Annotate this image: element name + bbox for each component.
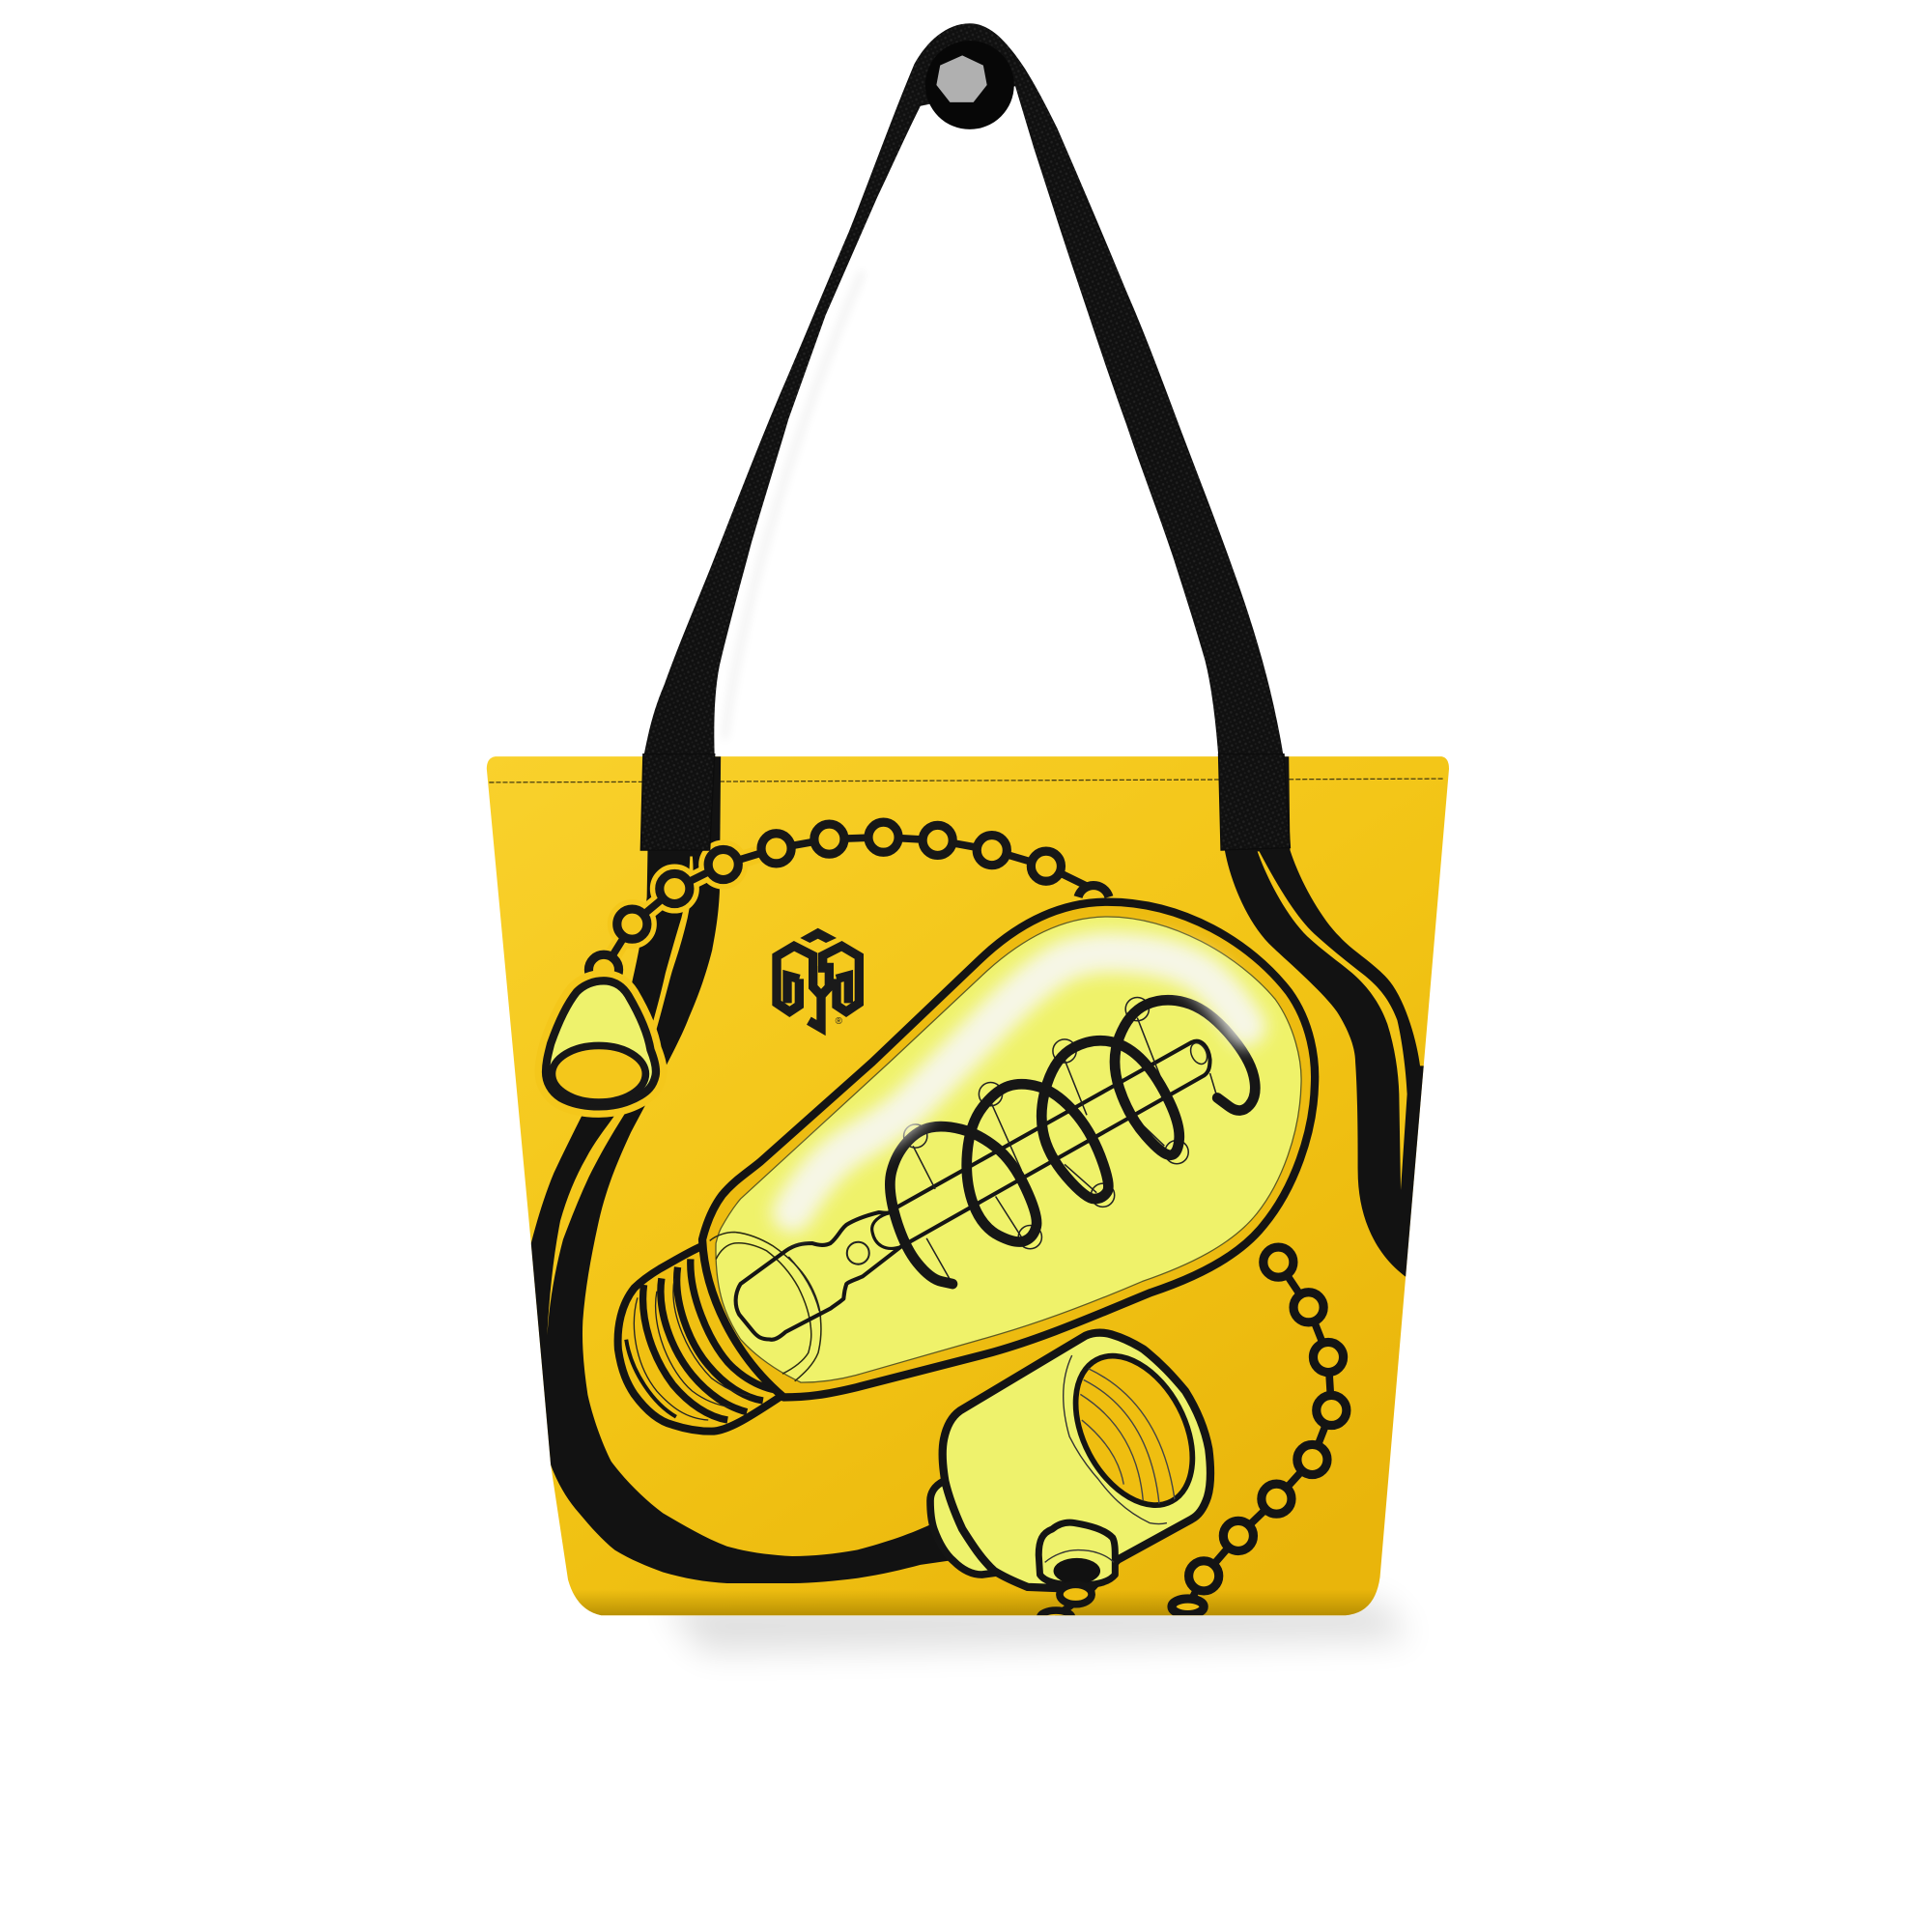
logo mark	[777, 928, 859, 1028]
socket flange	[930, 1481, 1001, 1575]
logo	[777, 928, 859, 1028]
right chain links	[1188, 1263, 1331, 1606]
registered mark: ®	[836, 1016, 843, 1027]
socket rim line	[1064, 1355, 1167, 1523]
spiral filament	[890, 1000, 1255, 1284]
left cord stripe	[547, 856, 694, 1336]
right strap patch	[1218, 754, 1290, 850]
strap shadow	[724, 271, 863, 739]
chain links	[611, 835, 1088, 956]
socket threads	[1080, 1369, 1176, 1504]
top ball chain with bell pull	[546, 822, 1109, 1106]
lower chain under socket	[1037, 1588, 1095, 1615]
glass inner fill	[716, 917, 1301, 1382]
light bulb	[618, 902, 1315, 1432]
chain beads	[588, 822, 1109, 984]
bag body	[487, 756, 1449, 1615]
left strap patch	[640, 754, 715, 850]
screw base	[618, 1246, 789, 1432]
glass neck rings	[710, 1233, 821, 1381]
bag bottom fold shading	[574, 1594, 1376, 1615]
socket body	[943, 1333, 1210, 1589]
lamp socket	[930, 1333, 1216, 1589]
right cord	[1225, 754, 1441, 1278]
bag drop shadow	[666, 1602, 1410, 1651]
pin grey centre	[936, 55, 987, 102]
base threads	[626, 1259, 787, 1420]
chain halo	[607, 840, 761, 956]
glass outer outline	[702, 902, 1315, 1397]
stem details	[788, 998, 1217, 1311]
hook pin	[925, 41, 1014, 129]
left cord	[518, 754, 955, 1583]
bell pull	[546, 980, 656, 1106]
stitch line	[489, 779, 1444, 782]
strap loop	[643, 23, 1284, 759]
filament stem	[736, 1041, 1210, 1340]
glass highlight	[792, 952, 1246, 1212]
socket nub	[1038, 1522, 1115, 1586]
tote bag product illustration	[487, 23, 1449, 1662]
socket opening	[1072, 1352, 1196, 1508]
right chain beads	[1172, 1247, 1347, 1615]
printed design	[469, 754, 1479, 1625]
right ball chain	[1172, 1247, 1347, 1615]
right cord stripe	[1258, 851, 1407, 1190]
